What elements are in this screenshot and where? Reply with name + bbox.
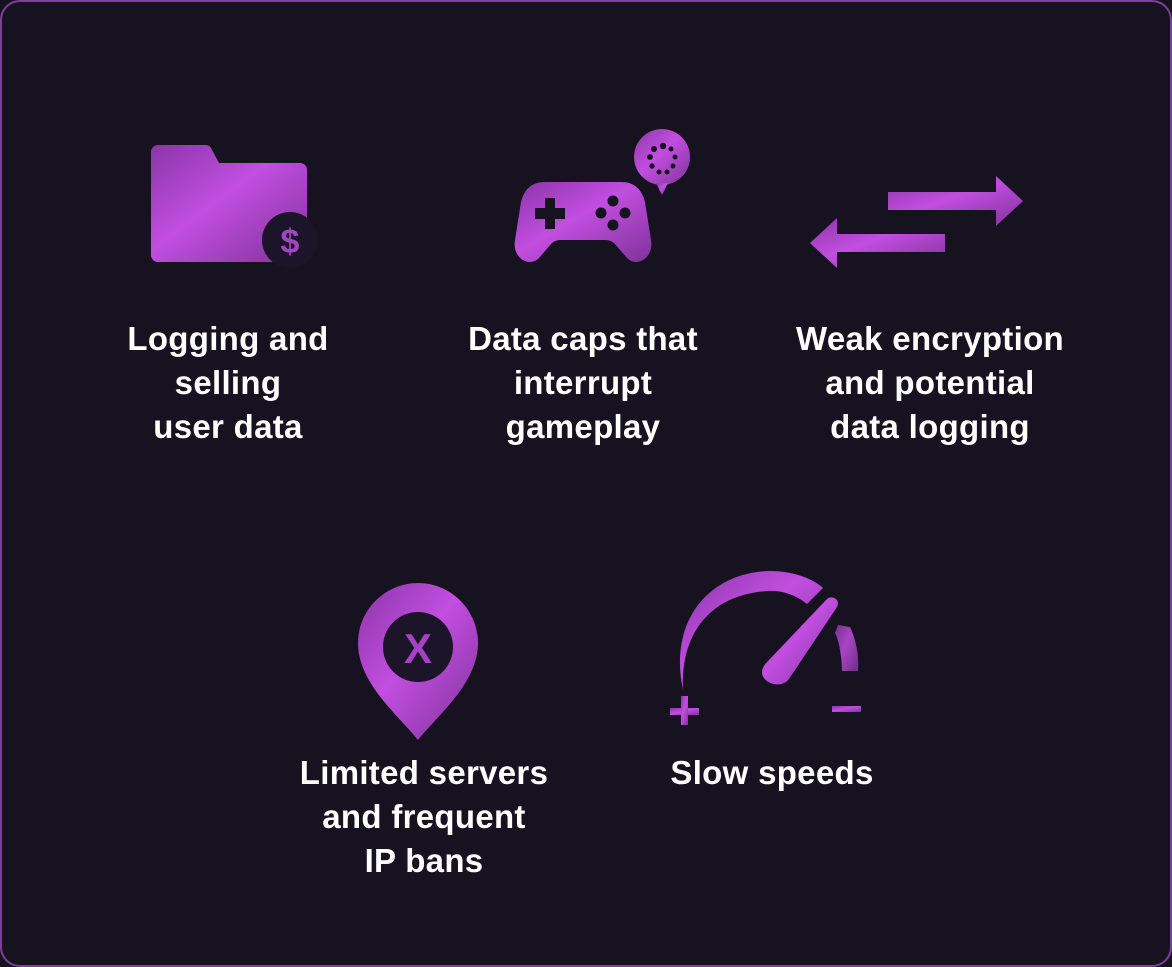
icon: location pin with X (358, 583, 478, 740)
text: limited servers: and frequent (322, 798, 526, 835)
text: weak encryption (796, 320, 1064, 445)
icon: location pin with X: X (404, 625, 432, 672)
text: slow speeds: Slow speeds (670, 754, 874, 791)
text: data caps: Data caps that (468, 320, 698, 357)
text: logging and selling user data: user data (153, 408, 303, 445)
icon: gamepad with loading bubble (515, 129, 690, 262)
text: limited servers: Limited servers (300, 754, 548, 791)
text: limited servers: IP bans (365, 842, 483, 879)
text: weak encryption: Weak encryption (796, 320, 1064, 357)
icon: speedometer (670, 571, 861, 725)
text: data caps: gameplay (506, 408, 660, 445)
icon: folder with dollar: $ (281, 223, 300, 261)
text: logging and selling user data (127, 320, 329, 445)
icon: exchange arrows (810, 176, 1023, 268)
text: logging and selling user data: selling (175, 364, 281, 401)
text: data caps (468, 320, 698, 445)
text: logging and selling user data: Logging and (127, 320, 329, 357)
text: limited servers (300, 754, 548, 879)
icon: folder with dollar (151, 145, 318, 268)
text: weak encryption: data logging (830, 408, 1030, 445)
text: data caps: interrupt (514, 364, 652, 401)
text: weak encryption: and potential (825, 364, 1035, 401)
